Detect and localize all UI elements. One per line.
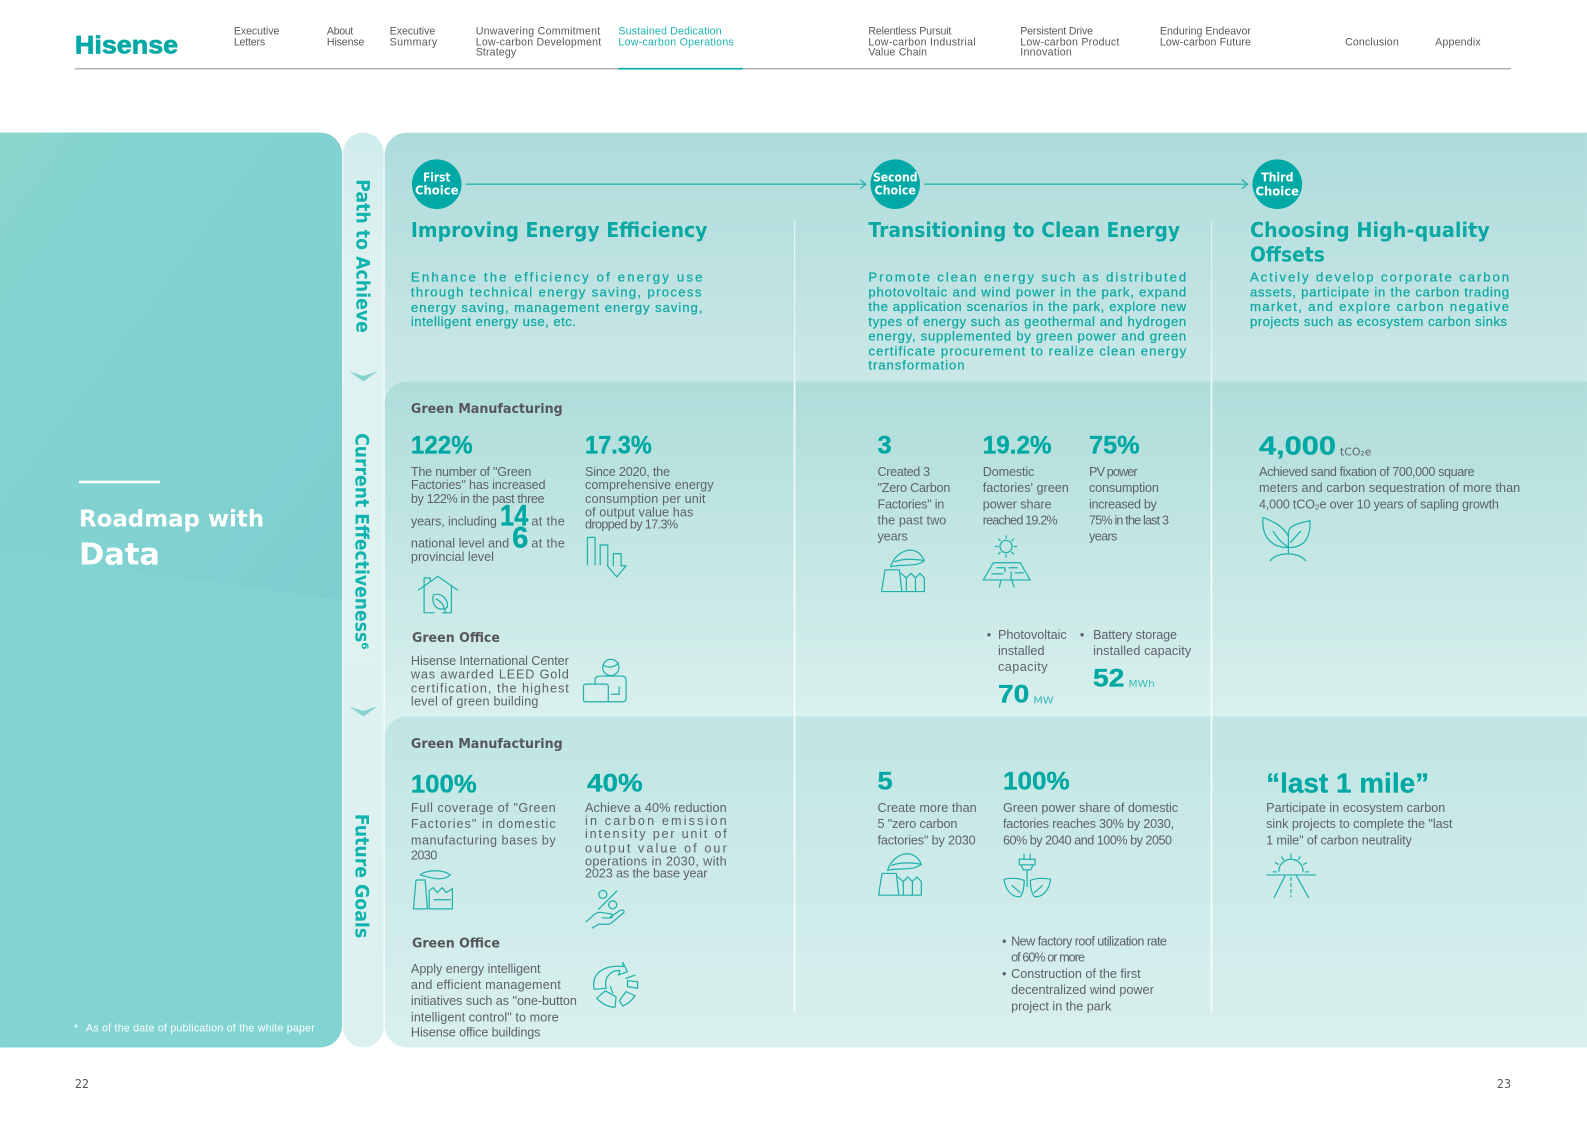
stat: 122% [411, 432, 565, 564]
text: first choice description: through technical energy saving, process [411, 285, 702, 300]
bullets: on-site projects: project in the park [1011, 999, 1112, 1013]
stat: 40% carbon intensity: in carbon emission [585, 814, 727, 828]
stat: 19.2%: 19.2% [983, 432, 1052, 460]
stat: 3 zero carbon factories: the past two [878, 513, 946, 527]
stat: 100% green factories: 2030 [411, 848, 437, 862]
stat: 40% carbon intensity: 2023 as the base year [585, 867, 707, 881]
stat: 40% carbon intensity: output value of our [585, 841, 727, 855]
stat: 75%: increased by [1089, 497, 1158, 511]
nav: Relentless Pursuit: Low-carbon Industrial [868, 37, 976, 49]
chevron: second [349, 706, 378, 717]
text: energy management initiatives: Apply energy intelligent [411, 962, 541, 976]
stat: 122%: by 122% in the past three [411, 492, 545, 506]
nav: Sustained Dedication (active): Low-carbon Operations [618, 37, 734, 49]
stat: last 1 mile: 1 mile" of carbon neutrality [1266, 833, 1413, 847]
nav: Unwavering Commitment: Strategy [476, 46, 517, 58]
bullet: battery storage capacity: installed capacity [1093, 644, 1192, 658]
text: first choice description: Enhance the efficiency of energy use [411, 270, 702, 285]
panel: path to achieve row [385, 133, 1587, 405]
stat: 122%: 14 [500, 499, 529, 532]
stat: 3 zero carbon factories: "Zero Carbon [878, 481, 950, 495]
stat: 100% green power: Green power share of domestic [1003, 801, 1178, 815]
nav: About Hisense: Hisense [327, 37, 364, 49]
icon: house with leaf [419, 576, 457, 613]
chevron: first [349, 371, 378, 382]
stat: 17.3%: comprehensive energy [585, 478, 714, 492]
text: first choice description: intelligent energy use, etc. [411, 314, 576, 329]
stat: 100% green power: factories reaches 30% by 2030, [1003, 817, 1174, 831]
bullet: battery storage capacity: • [1080, 628, 1084, 642]
badge: first choice: Choice [415, 184, 459, 198]
bullets: on-site projects: • [1002, 967, 1006, 981]
text: first choice description: energy saving, management energy saving, [411, 300, 702, 315]
stat: 100% green power: 100% [1003, 768, 1070, 796]
nav: Executive Letters: Executive [234, 26, 279, 38]
text: third choice description [1250, 270, 1509, 329]
text: energy management initiatives: intelligent control" to more [411, 1010, 559, 1024]
nav: Persistent Drive: Persistent Drive [1020, 26, 1093, 38]
text: third choice description: assets, participate in the carbon trading [1250, 285, 1509, 300]
arrow: first to second [466, 180, 866, 189]
icon: sprout [1263, 518, 1310, 561]
stat: last 1 mile [1266, 768, 1453, 847]
nav: Sustained Dedication (active) [618, 26, 734, 49]
nav: Enduring Endeavor [1160, 26, 1251, 49]
nav: Relentless Pursuit: Value Chain [868, 46, 927, 58]
icon: person at laptop [583, 659, 626, 702]
heading: green manufacturing: Green Manufacturing [411, 736, 563, 752]
text: second choice description: the application scenarios in the park, explore new [868, 299, 1187, 314]
stat: 3 zero carbon factories [878, 432, 950, 544]
stat: 19.2% [983, 432, 1069, 527]
text: third choice description: Actively develop corporate carbon [1250, 270, 1509, 285]
stat: 122%: Factories" has increased [411, 478, 546, 492]
bullet: battery storage capacity: Battery storage [1093, 628, 1177, 642]
nav: Sustained Dedication (active): Sustained Dedication [618, 26, 722, 38]
icon: hand with percent [586, 890, 624, 928]
nav: Conclusion: Conclusion [1345, 37, 1399, 49]
text: energy management initiatives: initiatives such as "one-button [411, 994, 577, 1008]
bullet: photovoltaic capacity: capacity [998, 660, 1048, 674]
heading: choosing high-quality offsets [1250, 218, 1490, 266]
heading: improving energy efficiency: Improving Energy Efficiency [411, 218, 707, 242]
bullet: photovoltaic capacity: Photovoltaic [998, 628, 1067, 642]
stat: 3 zero carbon factories: years [878, 530, 908, 544]
nav: Appendix: Appendix [1435, 37, 1481, 49]
stat: 3 zero carbon factories: Factories" in [878, 497, 944, 511]
text: LEED Gold: level of green building [411, 695, 538, 709]
bullets: on-site projects: decentralized wind power [1011, 983, 1154, 997]
nav: Unwavering Commitment: Low-carbon Development [476, 37, 601, 49]
stat: 17.3%: dropped by 17.3% [585, 518, 678, 532]
stat: 19.2%: reached 19.2% [983, 513, 1058, 527]
nav: About Hisense [327, 26, 364, 49]
heading: choosing high-quality offsets: Choosing High-quality [1250, 218, 1490, 242]
label: Future Goals: Future Goals [350, 814, 371, 938]
panel: current effectiveness row [385, 382, 1587, 739]
badge: third choice: Third [1261, 170, 1293, 184]
stat: 122%: years, including [411, 514, 497, 528]
nav: Unwavering Commitment: Unwavering Commitment [476, 26, 600, 38]
bullet: battery storage capacity [1080, 628, 1192, 692]
text: second choice description: transformation [868, 358, 965, 373]
stat: 122%: 122% [411, 432, 473, 460]
stat: 5 zero carbon factories: 5 "zero carbon [878, 817, 957, 831]
stat: 19.2%: Domestic [983, 465, 1034, 479]
bullet: battery storage capacity: MWh [1128, 679, 1155, 690]
text: first choice description [411, 270, 702, 329]
text: energy management initiatives [411, 962, 577, 1040]
stat: last 1 mile: sink projects to complete the "last [1266, 817, 1453, 831]
text: second choice description: types of energy such as geothermal and hydrogen [868, 314, 1186, 329]
panel: left title [0, 133, 342, 1047]
text: LEED Gold: was awarded LEED Gold [410, 667, 569, 681]
bullets: on-site projects: New factory roof utilization rate [1011, 934, 1167, 948]
stat: 5 zero carbon factories: 5 [878, 768, 893, 796]
stat: last 1 mile: “last 1 mile” [1266, 768, 1429, 799]
nav: Unwavering Commitment [476, 26, 601, 58]
bullets: on-site projects: of 60% or more [1011, 951, 1085, 965]
icon: bars trending down [587, 537, 626, 577]
text: LEED Gold: certification, the highest [411, 681, 569, 695]
stat: 100% green factories: manufacturing bases by [411, 833, 556, 847]
stat: 40% carbon intensity: Achieve a 40% reduction [585, 801, 727, 815]
stat: 100% green factories: Factories" in domestic [411, 817, 556, 831]
stat: 122%: provincial level [411, 550, 494, 564]
icon: factory with leaf [879, 854, 921, 895]
text: energy management initiatives: Hisense office buildings [411, 1026, 540, 1040]
icon: sun over road [1267, 854, 1316, 898]
stat: 75%: consumption [1089, 481, 1159, 495]
stat: 40% carbon intensity: intensity per unit of [585, 827, 727, 841]
stat: 122%: 6 [512, 522, 528, 555]
bullet: battery storage capacity: 52 [1093, 664, 1124, 692]
icon: factory with leaf [413, 871, 452, 909]
title: Roadmap with [79, 505, 264, 532]
nav: Executive Summary [390, 26, 438, 49]
stat: 4,000 tCO2e: tCO₂e [1340, 445, 1371, 458]
nav: Executive Letters [234, 26, 279, 49]
stat: 4,000 tCO2e: meters and carbon sequestration of more than [1259, 481, 1520, 495]
bullet: photovoltaic capacity [987, 628, 1067, 709]
badge: first choice: First [423, 170, 451, 184]
panel: future goals row [385, 717, 1587, 1047]
nav: Relentless Pursuit [868, 26, 976, 58]
label: Current Effectiveness: Current Effectiveness⁶ [350, 433, 371, 650]
title [79, 505, 264, 573]
nav: Enduring Endeavor: Low-carbon Future [1160, 37, 1251, 49]
text: LEED Gold: Hisense International Center [411, 654, 569, 668]
bullet: photovoltaic capacity: 70 [998, 681, 1029, 709]
nav: Persistent Drive: Innovation [1020, 46, 1072, 58]
page number: left: 22 [75, 1077, 89, 1091]
heading: transitioning to clean energy: Transitioning to Clean Energy [868, 218, 1180, 242]
stat: 100% green factories [411, 771, 556, 862]
text: second choice description: energy, supplemented by green power and green [868, 328, 1186, 343]
stat: 4,000 tCO2e: Achieved sand fixation of 700,000 square [1259, 465, 1475, 479]
icon: sun over solar panel [983, 536, 1030, 587]
text: energy management initiatives: and efficient management [411, 978, 561, 992]
stat: 100% green factories: Full coverage of "Green [411, 801, 556, 815]
column dividers [794, 221, 1212, 1012]
nav: Relentless Pursuit: Relentless Pursuit [868, 26, 951, 38]
heading: green office: Green Office [412, 630, 500, 646]
stat: 100% green factories: 100% [411, 771, 477, 799]
stat: 17.3%: Since 2020, the [585, 465, 670, 479]
nav: Persistent Drive: Low-carbon Product [1020, 37, 1119, 49]
stat: 17.3%: consumption per unit [585, 492, 706, 506]
stat: 40% carbon intensity: 40% [587, 770, 643, 798]
logo: Hisense: Hisense [75, 32, 178, 60]
text: second choice description: photovoltaic and wind power in the park, expand [868, 285, 1186, 300]
badge: first choice [412, 159, 462, 209]
text: second choice description: Promote clean energy such as distributed [868, 270, 1186, 285]
text: second choice description: certificate procurement to realize clean energy [868, 343, 1187, 358]
stat: 75%: 75% [1089, 432, 1140, 460]
heading: green manufacturing: Green Manufacturing [411, 401, 563, 417]
stat: 100% green power [1003, 768, 1178, 847]
stat: 17.3% [585, 432, 714, 532]
heading: green office: Green Office [412, 936, 500, 952]
stat: 19.2%: factories' green [983, 481, 1069, 495]
badge: third choice: Choice [1256, 185, 1299, 199]
heading: choosing high-quality offsets: Offsets [1250, 242, 1325, 266]
nav: Executive Summary: Summary [390, 37, 438, 49]
icon: circular segments [594, 962, 638, 1007]
stat: 100% green power: 60% by 2040 and 100% by 2050 [1003, 833, 1172, 847]
stat: 40% carbon intensity [585, 770, 727, 881]
nav: Persistent Drive [1020, 26, 1119, 58]
nav: About Hisense: About [327, 26, 353, 38]
title accent rule [79, 481, 160, 483]
stat: 75% [1089, 432, 1169, 544]
text: second choice description [868, 270, 1187, 373]
stat: 4,000 tCO2e: 4,000 tCO₂e over 10 years of sapling growth [1259, 497, 1499, 511]
stat: last 1 mile: Participate in ecosystem carbon [1266, 801, 1445, 815]
icon: factory with leaf [882, 550, 924, 592]
stat: 122%: national level and [411, 537, 509, 551]
badge: second choice: Second [873, 170, 917, 184]
arrow: second to third [924, 180, 1247, 189]
nav: Executive Summary: Executive [390, 26, 435, 38]
panel: section label strip [343, 133, 384, 1047]
stat: 5 zero carbon factories [878, 768, 977, 847]
stat: 122%: The number of "Green [411, 465, 531, 479]
stat: 75%: 75% in the last 3 [1089, 513, 1169, 527]
stat: 122%: at the [531, 537, 565, 551]
stat: 19.2%: power share [983, 497, 1052, 511]
badge: second choice: Choice [874, 184, 916, 198]
stat: 5 zero carbon factories: factories" by 2030 [878, 833, 976, 847]
text: third choice description: projects such as ecosystem carbon sinks [1250, 314, 1507, 329]
nav: Enduring Endeavor: Enduring Endeavor [1160, 26, 1251, 38]
footnote: As of the date of publication of the white paper [86, 1022, 315, 1034]
stat: 17.3%: 17.3% [585, 432, 652, 460]
bullet: photovoltaic capacity: MW [1033, 695, 1054, 706]
stat: 5 zero carbon factories: Create more than [878, 801, 977, 815]
nav: Executive Letters: Letters [234, 37, 265, 49]
stat: 4,000 tCO2e [1259, 431, 1520, 511]
stat: 17.3%: of output value has [585, 505, 693, 519]
stat: 75%: PV power [1089, 465, 1138, 479]
bullet: photovoltaic capacity: • [987, 628, 991, 642]
badge: third choice [1252, 159, 1302, 209]
text: third choice description: market, and explore carbon negative [1250, 299, 1509, 314]
stat: 3 zero carbon factories: Created 3 [878, 465, 930, 479]
stat: 4,000 tCO2e: 4,000 [1259, 431, 1336, 461]
stat: 3 zero carbon factories: 3 [878, 432, 892, 460]
bullets: on-site projects: Construction of the first [1011, 967, 1141, 981]
label: Path to Achieve: Path to Achieve [351, 179, 372, 333]
text: LEED Gold [410, 654, 569, 709]
bullet: photovoltaic capacity: installed [998, 644, 1044, 658]
title: Data [79, 538, 160, 573]
stat: 122%: at the [531, 514, 565, 528]
bullets: on-site projects [1002, 934, 1167, 1013]
badge: second choice [870, 159, 920, 209]
page number: right: 23 [1497, 1077, 1511, 1091]
top navigation [75, 26, 1511, 70]
footnote: * [74, 1022, 78, 1034]
bullets: on-site projects: • [1002, 934, 1006, 948]
icon: plug with leaves [1004, 854, 1051, 897]
stat: 40% carbon intensity: operations in 2030, with [585, 855, 727, 869]
stat: 75%: years [1089, 530, 1117, 544]
